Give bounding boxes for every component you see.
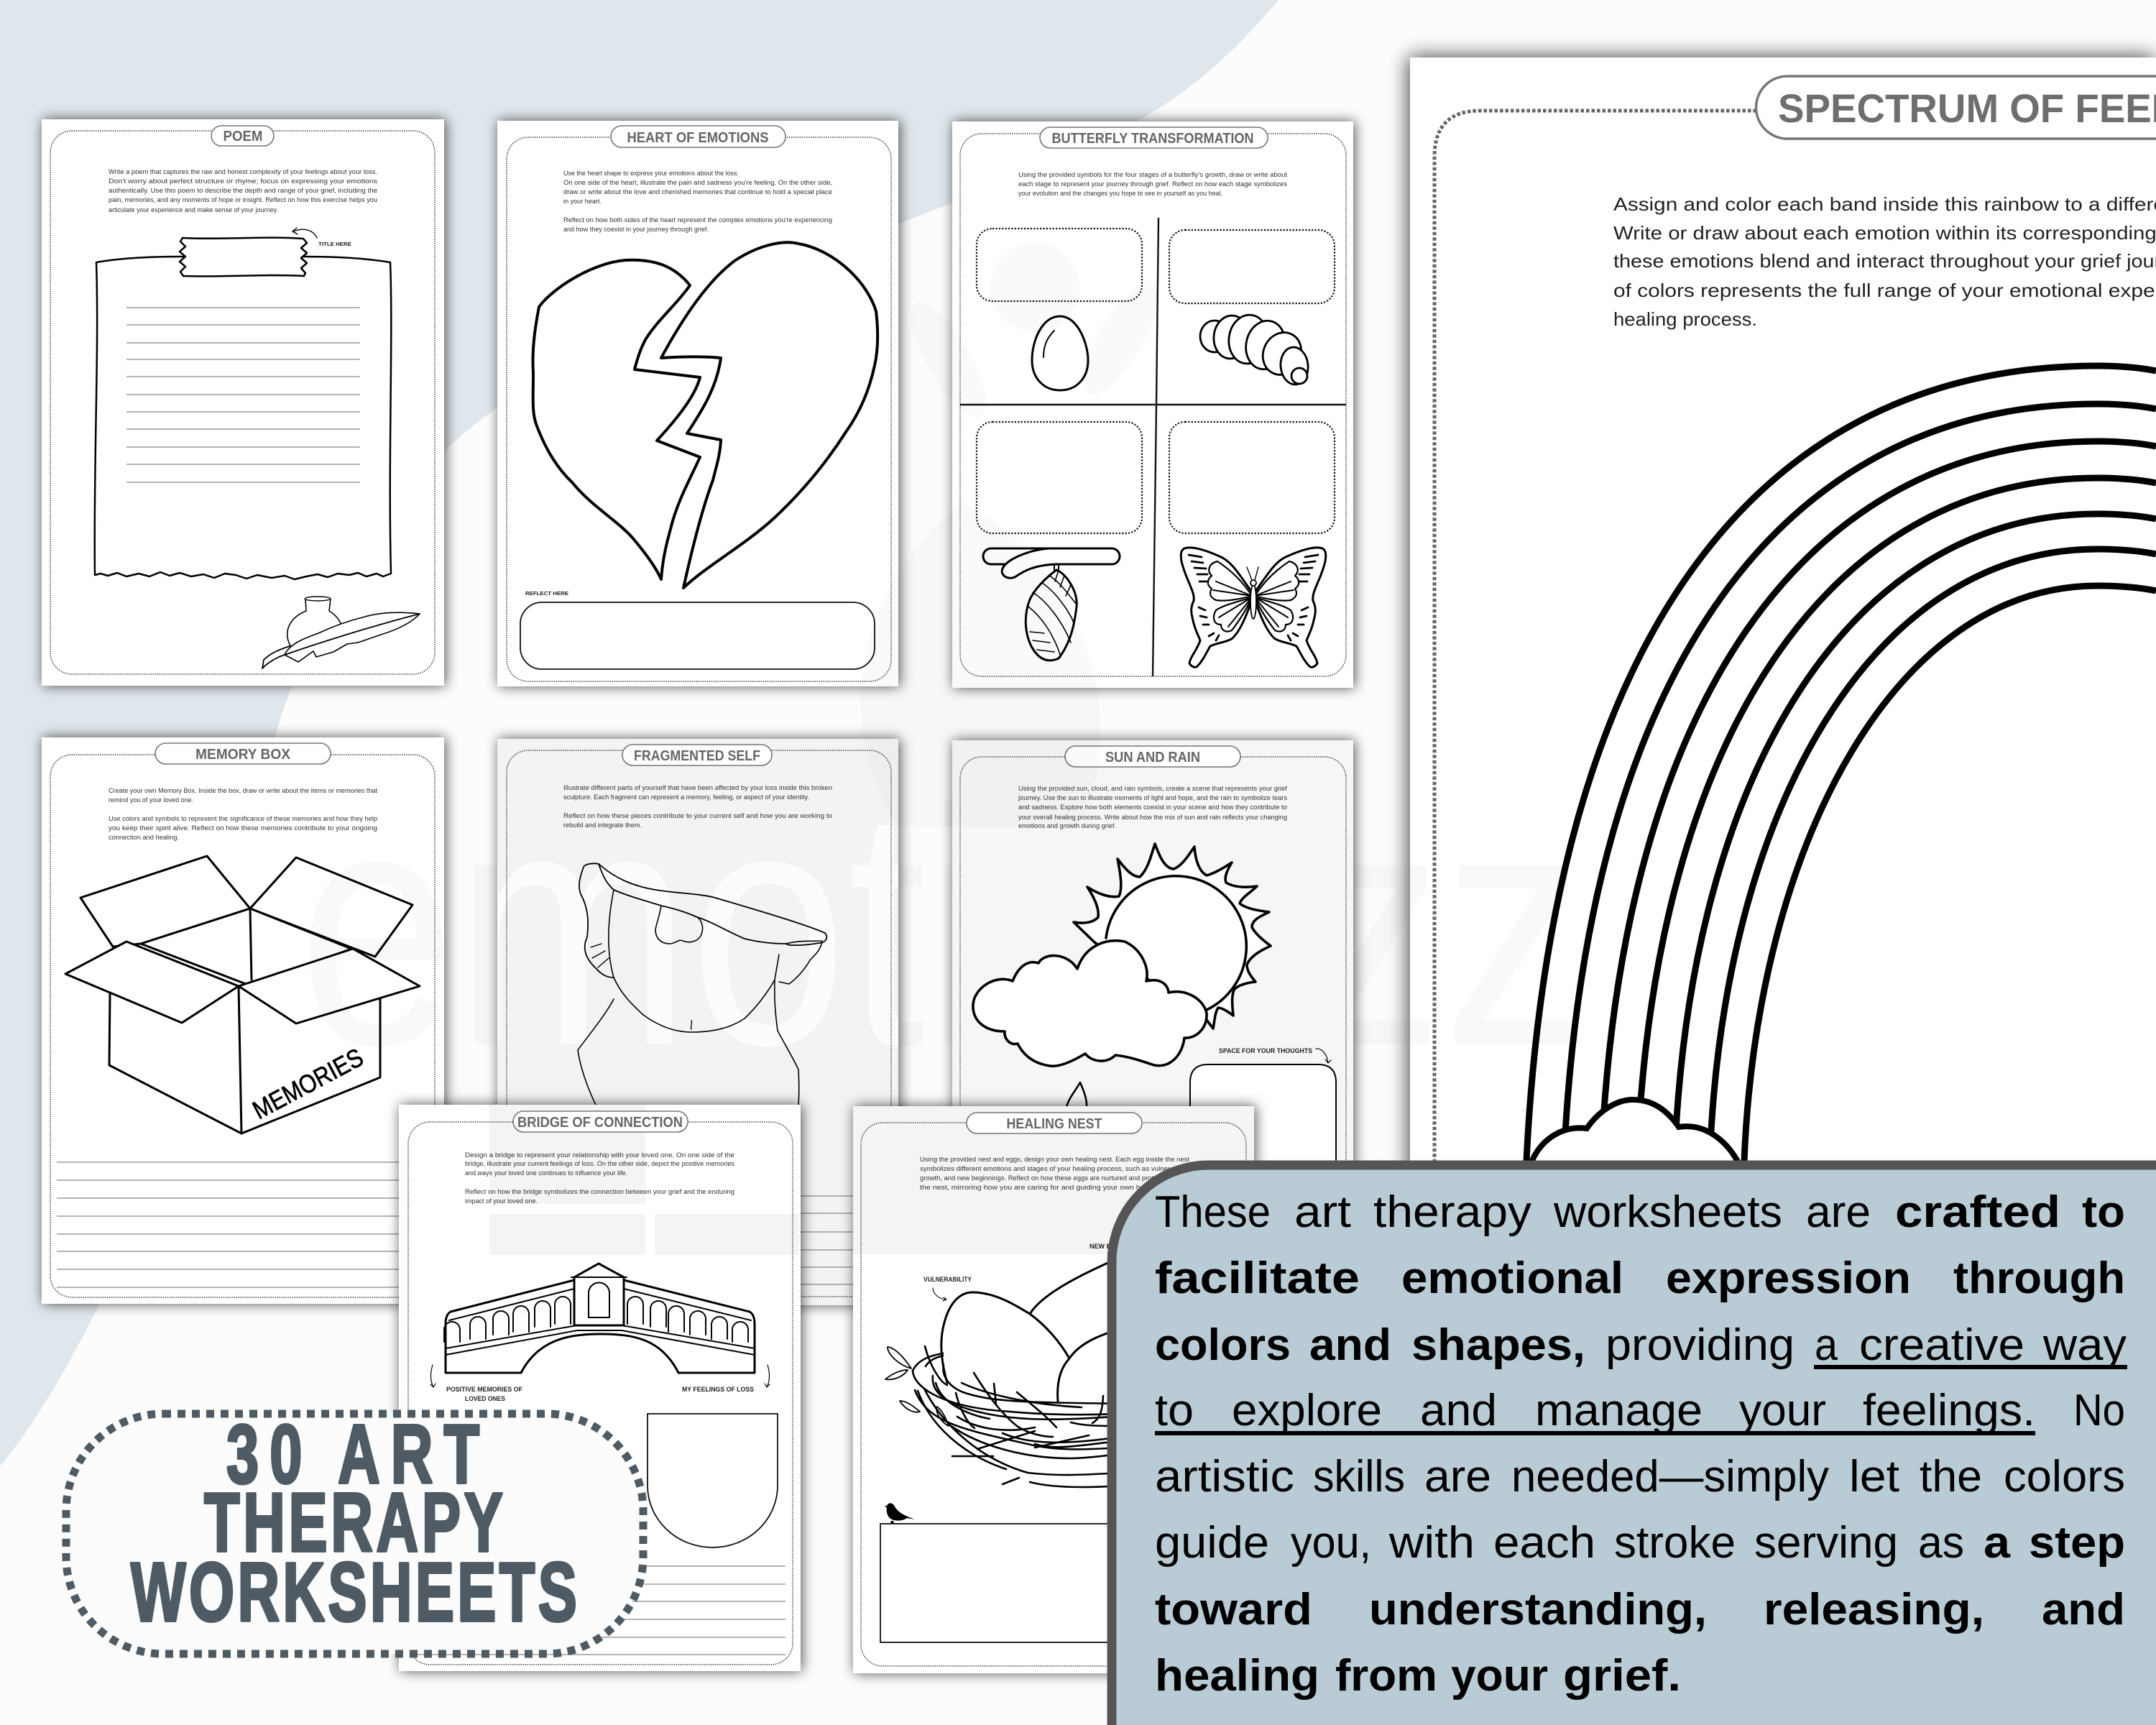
- rainbow arcs: [1526, 366, 2156, 1161]
- badge: 30 art therapy worksheets: [66, 1408, 643, 1654]
- text line 4: your: [1739, 1386, 1826, 1435]
- instructions: sculpture. Each fragment can represent a memory, feeling, or aspect of your identity.: [563, 794, 809, 801]
- title pill: bridge of connection: BRIDGE OF CONNECTION: [517, 1115, 683, 1131]
- text line 4: feelings.: [1863, 1386, 2035, 1435]
- icon: rain drop: [1066, 1082, 1087, 1110]
- instructions: the nest, mirroring how you are caring for and guiding your own healing journey.: [920, 1184, 1189, 1191]
- icon: open cardboard box: [65, 856, 420, 1133]
- title pill: heart of emotions: HEART OF EMOTIONS: [627, 130, 769, 146]
- instructions text: healing process.: [1613, 308, 1757, 330]
- instructions: emotions and growth during grief.: [1018, 822, 1116, 829]
- panel: poem worksheet: [42, 119, 444, 686]
- paper sheet with torn bottom edge: [95, 257, 391, 579]
- text line 6: serving: [1754, 1518, 1898, 1568]
- text line 1: to: [2082, 1187, 2125, 1237]
- icon: bridge: [444, 1264, 755, 1373]
- text line 5: are: [1424, 1452, 1491, 1501]
- instructions: remind you of your loved one.: [109, 796, 193, 804]
- tape with zigzag sides: [180, 238, 307, 276]
- instructions: Use colors and symbols to represent the significance of these memories and how they help: [109, 815, 377, 822]
- label: positive memories of loved ones: POSITIVE MEMORIES OF: [446, 1386, 522, 1393]
- title pill: memory box: [155, 743, 331, 764]
- title pill: [1756, 76, 2156, 139]
- label: new beginnings: NEW BEGINNINGS: [1089, 1243, 1148, 1250]
- instructions: pain, memories, and any moments of hope or insight. Reflect on how this exercise helps you: [109, 196, 377, 203]
- title pill: healing nest: [967, 1113, 1142, 1133]
- text line 4: to: [1155, 1386, 1194, 1435]
- instructions: and ways your loved one continues to influence your life.: [465, 1169, 627, 1177]
- instructions: authentically. Use this poem to describe the depth and range of your grief, including the: [109, 187, 377, 194]
- title pill: fragmented self: FRAGMENTED SELF: [634, 748, 760, 764]
- text line 3: creative: [1859, 1320, 2024, 1370]
- instructions: [1018, 785, 1288, 829]
- title pill: poem: POEM: [223, 129, 263, 144]
- arrow to egg: [933, 1288, 946, 1301]
- badge: 30 art therapy worksheets: THERAPY: [204, 1476, 503, 1569]
- text line 2: expression: [1666, 1254, 1911, 1303]
- text line 5: let: [1849, 1452, 1899, 1501]
- instructions: Using the provided sun, cloud, and rain symbols, create a scene that represents your grief: [1018, 785, 1288, 792]
- icon: egg: [1032, 316, 1088, 390]
- text line 7: understanding,: [1369, 1585, 1707, 1634]
- instructions: Reflect on how these pieces contribute to your current self and how you are working to: [563, 812, 832, 819]
- instructions: On one side of the heart, illustrate the pain and sadness you're feeling. On the other side,: [563, 179, 832, 186]
- text line 7: releasing,: [1764, 1585, 1984, 1634]
- instructions: journey. Use the sun to illustrate moments of light and hope, and the rain to symbolize tears: [1018, 794, 1288, 801]
- panel: spectrum of feelings large worksheet: [1410, 58, 2156, 1236]
- title pill: poem: [211, 126, 274, 146]
- instructions: impact of your loved one.: [465, 1197, 538, 1205]
- instructions: rebuild and integrate them.: [563, 822, 642, 829]
- dotted writing boxes: [977, 229, 1335, 533]
- text line 8: your: [1451, 1651, 1548, 1701]
- text line 4: manage: [1535, 1386, 1703, 1435]
- title pill: sun and rain: [1065, 746, 1240, 767]
- instructions: Reflect on how both sides of the heart represent the complex emotions you're experiencing: [563, 216, 832, 224]
- label: title here: TITLE HERE: [318, 241, 351, 247]
- text line 6: stroke: [1614, 1518, 1736, 1568]
- icon: ink bottle and feather: [262, 597, 420, 668]
- instructions: and how they coexist in your journey through grief.: [563, 226, 709, 233]
- icon: broken sculpture: [578, 863, 826, 1105]
- panel: bridge of connection worksheet: [399, 1105, 801, 1671]
- text line 3: a: [1815, 1320, 1838, 1370]
- instructions: Illustrate different parts of yourself that have been affected by your loss inside this broken: [563, 784, 832, 791]
- text line 3: providing: [1606, 1320, 1795, 1370]
- text line 5: skills: [1313, 1452, 1405, 1501]
- instructions: connection and healing.: [109, 834, 179, 841]
- instructions: Using the provided nest and eggs, design your own healing nest. Each egg inside the nest: [920, 1156, 1190, 1163]
- panel: sun and rain worksheet: [952, 740, 1353, 1307]
- instructions: growth, and new beginnings. Reflect on how these eggs are nurtured and protected within: [920, 1174, 1189, 1182]
- icon: cloud: [973, 941, 1207, 1066]
- label on box: memories: MEMORIES: [248, 1042, 368, 1125]
- watermark tint blocks: [489, 1105, 799, 1255]
- instructions: your evolution and the changes you hope to see in yourself as you heal.: [1018, 190, 1222, 197]
- ruled writing lines: [57, 1162, 435, 1287]
- instructions: each stage to represent your journey through grief. Reflect on how each stage symbolizes: [1018, 180, 1288, 188]
- icon: broken heart left half: [533, 260, 700, 579]
- icon: bird: [885, 1503, 915, 1523]
- text line 5: needed—simply: [1511, 1452, 1829, 1501]
- title pill: fragmented self: [622, 745, 772, 765]
- text line 1: are: [1806, 1187, 1871, 1237]
- instructions: your overall healing process. Write about how the mix of sun and rain reflects your changing: [1018, 814, 1287, 821]
- text line 5: colors: [2004, 1452, 2125, 1501]
- label: positive memories of loved ones: [446, 1386, 522, 1402]
- label: vulnerability: VULNERABILITY: [923, 1276, 972, 1283]
- background blue curved shape: [0, 0, 1279, 1466]
- text line 6: as: [1918, 1518, 1964, 1568]
- instructions: in your heart.: [563, 198, 602, 205]
- callout panel: description: [1112, 1165, 2156, 1725]
- instructions: articulate your experience and make sense of your journey.: [109, 206, 278, 213]
- instructions: you keep their spirit alive. Reflect on how these memories contribute to your ongoing: [109, 824, 377, 832]
- watermark: emotionzz: emotionzz: [298, 738, 1585, 1116]
- text line 2: emotional: [1401, 1254, 1623, 1303]
- text line 7: toward: [1155, 1585, 1312, 1634]
- dotted page frame: [1434, 111, 1756, 1222]
- text line 6: with: [1388, 1518, 1475, 1568]
- text line 3: shapes,: [1411, 1320, 1585, 1370]
- instructions: [465, 1151, 735, 1205]
- badge: 30 art therapy worksheets: WORKSHEETS: [131, 1546, 577, 1639]
- text line 6: you,: [1291, 1518, 1371, 1568]
- panel: fragmented self worksheet: [489, 729, 1262, 1315]
- instructions: Using the provided symbols for the four stages of a butterfly's growth, draw or write about: [1018, 171, 1288, 178]
- instructions: Create your own Memory Box. Inside the box, draw or write about the items or memories that: [109, 787, 378, 794]
- instructions text: [1613, 193, 2156, 330]
- icon: butterfly: [1181, 548, 1326, 667]
- text line 3: way: [2042, 1320, 2127, 1370]
- text line 2: facilitate: [1155, 1254, 1360, 1303]
- instructions: Write a poem that captures the raw and honest complexity of your feelings about your loss.: [109, 168, 377, 175]
- badge: 30 art therapy worksheets: 30 ART: [226, 1408, 479, 1501]
- instructions: [563, 170, 832, 233]
- instructions: Design a bridge to represent your relationship with your loved one. On one side of the: [465, 1151, 734, 1159]
- thoughts box: [1190, 1064, 1336, 1287]
- text line 6: step: [2029, 1518, 2125, 1568]
- label: my feelings of loss: MY FEELINGS OF LOSS: [682, 1386, 754, 1393]
- title pill: memory box: MEMORY BOX: [195, 747, 291, 763]
- instructions: [109, 787, 378, 841]
- instructions: Use the heart shape to express your emotions about the loss.: [563, 170, 739, 177]
- panel: healing nest worksheet: [853, 1106, 1254, 1673]
- arrows to labels: [430, 1365, 770, 1387]
- icon: sun: [1074, 844, 1271, 1029]
- label: reflect here: REFLECT HERE: [525, 590, 568, 597]
- ruled lines: [413, 1566, 786, 1655]
- icon: caterpillar: [1200, 313, 1309, 386]
- title pill: butterfly transformation: BUTTERFLY TRANSFORMATION: [1052, 131, 1253, 147]
- icon: chrysalis on branch: [983, 548, 1120, 661]
- icon: nest with eggs: [885, 1257, 1121, 1487]
- title pill: heart of emotions: [611, 126, 786, 147]
- instructions: and sadness. Explore how both elements coexist in your scene and how they contribute to: [1018, 804, 1287, 811]
- title pill: sun and rain: SUN AND RAIN: [1105, 750, 1200, 765]
- text line 5: artistic: [1155, 1452, 1294, 1501]
- ruled writing lines: [126, 308, 360, 482]
- instructions: Reflect on how the bridge symbolizes the connection between your grief and the enduring: [465, 1188, 734, 1195]
- instructions: [563, 784, 832, 829]
- instructions: symbolizes different emotions and stages of your healing process, such as vulnerability,: [920, 1165, 1189, 1172]
- watermark: emotionzz: [944, 799, 952, 827]
- icon: broken heart right half: [661, 242, 877, 588]
- panel: memory box worksheet: [42, 737, 444, 1304]
- instructions: draw or write about the love and cherished memories that continue to hold a special place: [563, 188, 832, 196]
- text line 6: each: [1493, 1518, 1595, 1568]
- text line 4: No: [2073, 1386, 2125, 1435]
- arrow to title: [292, 228, 317, 238]
- text line 1: worksheets: [1553, 1187, 1782, 1237]
- text line 1: crafted: [1895, 1187, 2060, 1237]
- text line 8: healing: [1155, 1651, 1319, 1701]
- instructions: bridge, illustrate your current feelings of loss. On the other side, depict the positive memories: [465, 1160, 735, 1167]
- text line 7: and: [2042, 1585, 2125, 1634]
- instructions: [1018, 171, 1288, 197]
- text line 8: grief.: [1563, 1651, 1681, 1701]
- rainbow cloud: [1531, 1100, 1739, 1164]
- watermark tint strip: [853, 1106, 1254, 1254]
- instructions: [920, 1156, 1190, 1191]
- text line 2: through: [1953, 1254, 2125, 1303]
- instructions: [109, 168, 378, 213]
- reflection box: [880, 1524, 1254, 1642]
- text line 3: colors: [1155, 1320, 1291, 1370]
- text line 6: guide: [1155, 1518, 1269, 1568]
- panel: fragmented self worksheet: emotionzz: [298, 738, 1585, 1116]
- text line 3: and: [1309, 1320, 1391, 1370]
- text line 6: a: [1984, 1518, 2011, 1568]
- text line 5: the: [1920, 1452, 1982, 1501]
- instructions: Don't worry about perfect structure or rhyme; focus on expressing your emotions: [109, 178, 378, 185]
- text line 1: therapy: [1373, 1187, 1531, 1237]
- text line 4: and: [1420, 1386, 1497, 1435]
- ruled lines: [512, 1196, 885, 1284]
- label: positive memories of loved ones: LOVED ONES: [465, 1395, 505, 1402]
- reflection box: [520, 602, 875, 669]
- panel: heart of emotions worksheet: [497, 121, 898, 686]
- arrow to thoughts box: [1316, 1049, 1331, 1063]
- text line 1: art: [1294, 1187, 1351, 1237]
- icon: shield shape: [648, 1414, 778, 1547]
- label: space for your thoughts: SPACE FOR YOUR THOUGHTS: [1219, 1047, 1312, 1054]
- panel: butterfly transformation worksheet: [952, 121, 1353, 688]
- text line 4: explore: [1232, 1386, 1382, 1435]
- title pill: healing nest: HEALING NEST: [1006, 1116, 1102, 1132]
- text line 8: from: [1335, 1651, 1437, 1701]
- text line 1: These: [1155, 1187, 1271, 1237]
